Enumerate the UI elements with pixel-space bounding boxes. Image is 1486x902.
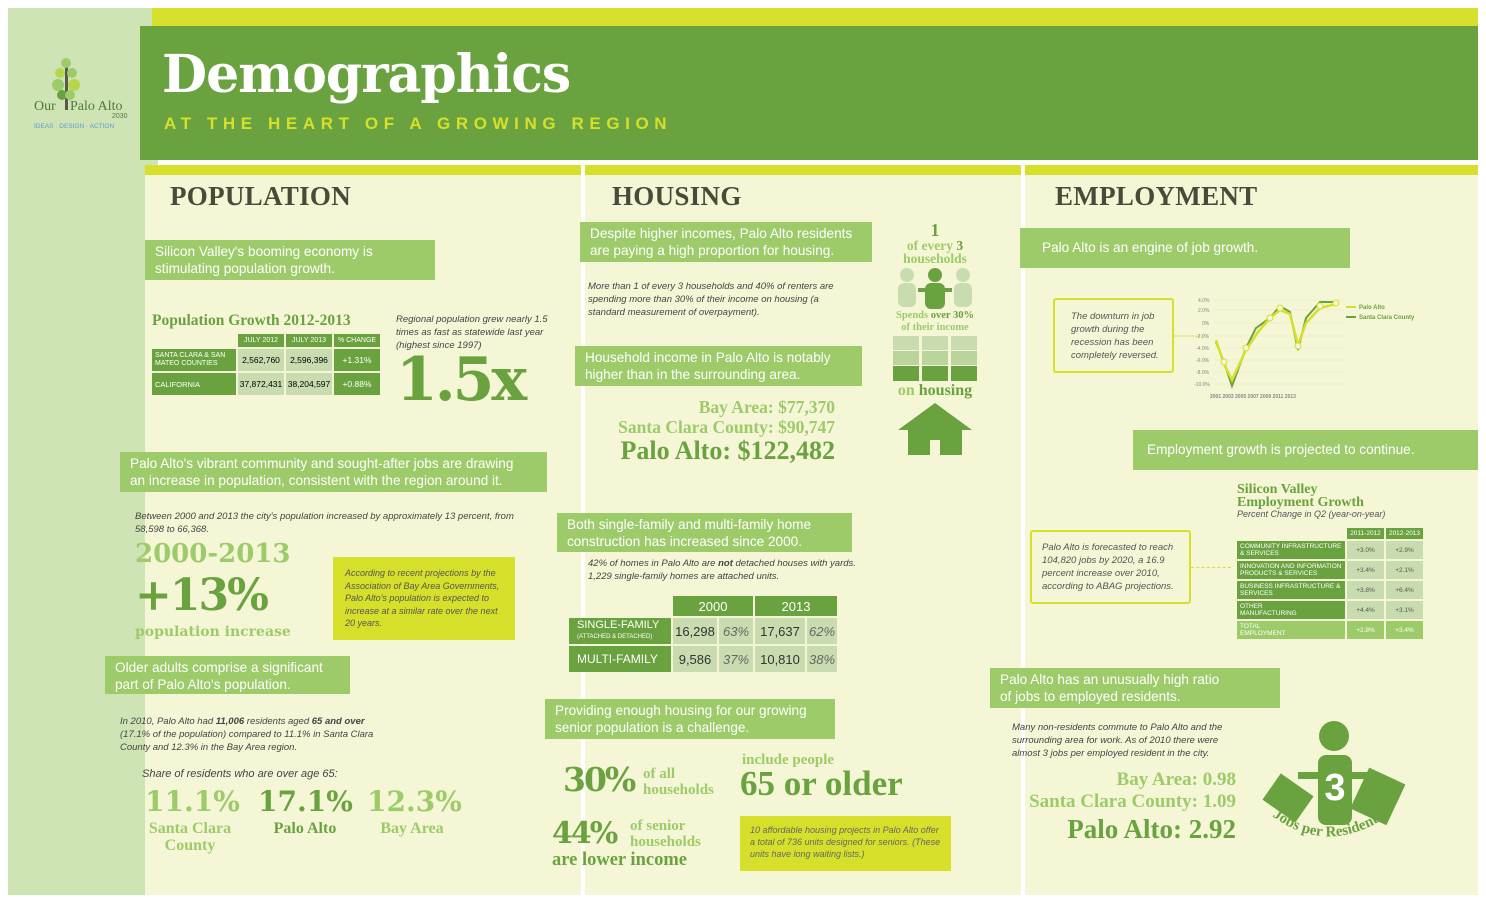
text: 2000-2013: Between 2000 and 2013 the city's population increased by approximately 13 percent, from 58,598 to 66,368.: [135, 511, 514, 535]
employment table: +2.1%: [1395, 566, 1414, 574]
icon: jobs per resident: 3: [1324, 767, 1346, 809]
stat: shares: Santa Clara County: [149, 820, 231, 854]
employment table: +2.9%: [1395, 546, 1414, 554]
header: [140, 26, 1478, 160]
band: vibrant community: an increase in population, consistent with the region around it.: [130, 473, 503, 488]
stat: 30%: include people: [742, 752, 834, 768]
line chart: 4.0%: [1198, 298, 1210, 304]
employment table: +4.4%: [1356, 606, 1375, 614]
band: booming economy: Silicon Valley's booming economy is: [155, 244, 373, 259]
heading: employment: EMPLOYMENT: [1055, 181, 1258, 211]
employment table: +3.8%: [1356, 586, 1375, 594]
housing table: MULTI-FAMILY: [577, 652, 658, 666]
table title: Population Growth 2012-2013: [152, 312, 351, 329]
text: commute: Many non-residents commute to Palo Alto and the surrounding area for work. As of 2010 there were almost 3 jobs per employed resident in the city.: [1012, 722, 1222, 759]
employment table: +3.4%: [1356, 566, 1375, 574]
employment table: OTHER: [1240, 603, 1263, 610]
regional text: Regional population grew nearly 1.5 times as fast as statewide last year (highest since 1997): [396, 314, 548, 351]
title: Demographics: [162, 44, 570, 105]
housing table: 63%: [723, 624, 749, 638]
income figures: Palo Alto: $122,482: [620, 436, 835, 465]
employment table: TOTAL: [1240, 623, 1260, 630]
stat: +13%: [135, 539, 291, 640]
employment table: 2012-2013: [1389, 530, 1420, 537]
stat: +13%: 2000-2013: [135, 539, 291, 569]
band: booming economy: stimulating population growth.: [155, 261, 335, 276]
band: construction: [557, 513, 852, 552]
housing table: 10,810: [760, 652, 800, 666]
icon column: 1 of 3 households: 1: [930, 220, 940, 240]
employment table: MANUFACTURING: [1240, 610, 1297, 617]
band: higher incomes: [580, 222, 872, 262]
logo: [34, 58, 128, 130]
stat: 30%: of all: [643, 766, 675, 782]
stat: shares: 11.1%: [145, 785, 240, 818]
stat: 44%: 44%: [552, 816, 616, 851]
stat: +13%: population increase: [135, 624, 291, 640]
line chart: Palo Alto: [1359, 305, 1385, 311]
icon: jobs per resident: [1262, 721, 1406, 836]
band: ratio: Palo Alto has an unusually high ratio: [1000, 672, 1219, 687]
stat: shares: Palo Alto: [274, 820, 336, 837]
line chart: -4.0%: [1196, 346, 1210, 352]
table title: SV employment: Percent Change in Q2 (year-on-year): [1237, 509, 1385, 519]
stat: 30%: 30%: [563, 760, 634, 799]
icon column: 1 of 3 households: on housing: [898, 382, 972, 399]
stat: shares: 17.1%: [258, 785, 353, 818]
logo: 2030: [112, 113, 128, 120]
housing table: 37%: [723, 652, 749, 666]
band: older adults: [105, 656, 350, 694]
text: 2010 seniors: In 2010, Palo Alto had 11,006 residents aged 65 and over (17.1% of the population) compared to 11.1% in Santa Clara County and 12.3% in the Bay Area region.: [120, 716, 373, 753]
callout: forecast: Palo Alto is forecasted to reach 104,820 jobs by 2020, a 16.9 percent increase over 2010, according to ABAG projections.: [1042, 542, 1174, 592]
line chart: 2001 2003 2005 2007 2009 2011 2013: [1210, 394, 1296, 400]
income figures: Santa Clara County: $90,747: [618, 417, 835, 437]
line chart: -2.0%: [1196, 334, 1210, 340]
band: construction: construction has increased since 2000.: [567, 534, 802, 549]
band: senior housing: senior population is a challenge.: [555, 720, 749, 735]
employment table: COMMUNITY INFRASTRUCTURE & SERVICES: [1240, 543, 1341, 557]
housing table: 2013: [782, 598, 810, 614]
table title: SV employment: Silicon Valley: [1237, 482, 1318, 497]
line chart: Santa Clara County: [1359, 315, 1415, 321]
band: higher incomes: Despite higher incomes, Palo Alto residents: [590, 226, 852, 241]
ratios: [1029, 769, 1236, 844]
callout: projections: According to recent projections by the Association of Bay Area Governments, Palo Alto's population is expected to increase at a similar rate over the next 20 years.: [345, 568, 499, 628]
stat: 30%: [563, 752, 903, 803]
panel: housing: [585, 165, 1021, 895]
icon column: 1 of 3 households: households: [903, 251, 967, 266]
line chart: -6.0%: [1196, 358, 1210, 364]
population table: +0.88%: [342, 379, 372, 389]
table title: SV employment: Employment Growth: [1237, 495, 1364, 510]
line chart: -10.0%: [1194, 382, 1210, 388]
population table: JULY 2013: [292, 337, 326, 344]
housing table: [569, 596, 837, 672]
employment table: +3.0%: [1356, 546, 1375, 554]
employment table: EMPLOYMENT: [1240, 630, 1286, 637]
panel: employment: [1025, 165, 1478, 895]
line chart: 0%: [1202, 321, 1210, 327]
housing table: (ATTACHED & DETACHED): [577, 634, 652, 640]
housing table: 16,298: [675, 624, 715, 638]
band: household income: Household income in Palo Alto is notably: [585, 350, 831, 365]
stat: shares: [145, 785, 462, 854]
callout: affordable units: 10 affordable housing projects in Palo Alto offer a total of 736 units designed for seniors. (These units have long waiting lists.): [750, 825, 940, 859]
callout: forecast: [1030, 530, 1191, 604]
stat: shares: Bay Area: [380, 820, 444, 837]
icon column: 1 of 3 households: Spends over 30%: [896, 310, 974, 321]
housing table: 38%: [809, 652, 835, 666]
band: vibrant community: [120, 452, 547, 492]
population table: CALIFORNIA: [155, 380, 200, 388]
band: household income: higher than in the surrounding area.: [585, 367, 800, 382]
housing table: 9,586: [679, 652, 711, 666]
population table: 2,596,396: [290, 355, 328, 365]
stat: 30%: 65 or older: [740, 764, 903, 803]
employment table: INNOVATION AND INFORMATION PRODUCTS & SERVICES: [1240, 563, 1341, 577]
heading: housing: HOUSING: [612, 181, 742, 211]
text: detached: 42% of homes in Palo Alto are not detached houses with yards. 1,229 single-family homes are attached units.: [588, 558, 856, 582]
icon column: 1 of 3 households: of every 3: [907, 238, 963, 253]
callout: projections: [333, 557, 515, 640]
stat: 44%: [552, 816, 701, 870]
band: engine: [1020, 228, 1350, 268]
logo: Our: [34, 99, 56, 114]
band: construction: Both single-family and multi-family home: [567, 517, 811, 532]
ratios: Bay Area: 0.98: [1117, 769, 1236, 790]
band: senior housing: Providing enough housing for our growing: [555, 703, 807, 718]
population table: SANTA CLARA & SAN MATEO COUNTIES: [155, 352, 225, 367]
icon column: 1 of 3 households: [893, 220, 977, 455]
housing table: 62%: [809, 624, 835, 638]
population table: [152, 334, 380, 395]
band: engine: Palo Alto is an engine of job growth.: [1042, 240, 1258, 255]
callout: downturn: The downturn in job growth during the recession has been completely reversed.: [1071, 311, 1159, 361]
population table: 2,562,760: [242, 355, 280, 365]
band: ratio: [990, 668, 1280, 708]
logo: IDEAS · DESIGN · ACTION: [34, 123, 114, 130]
top yellow bar: [152, 8, 1478, 26]
band: higher incomes: are paying a high proportion for housing.: [590, 243, 834, 258]
employment table: +3.1%: [1395, 606, 1414, 614]
population table: JULY 2012: [244, 337, 278, 344]
subtitle: AT THE HEART OF A GROWING REGION: [164, 114, 672, 133]
icon column: 1 of 3 households: of their income: [901, 322, 969, 333]
panel: population: [145, 165, 581, 895]
band: ratio: of jobs to employed residents.: [1000, 689, 1181, 704]
band: household income: [575, 346, 862, 386]
text: 1 of 3: More than 1 of every 3 households and 40% of renters are spending more than 30% of their income on housing (a standard measurement of overpayment).: [588, 281, 834, 318]
heading: population: POPULATION: [170, 181, 351, 211]
stat: 44%: of senior: [630, 818, 685, 834]
stat: shares: 12.3%: [367, 785, 462, 818]
ratios: Palo Alto: 2.92: [1067, 814, 1236, 844]
income figures: Bay Area: $77,370: [699, 397, 835, 417]
line chart: 2.0%: [1198, 308, 1210, 314]
income figures: [618, 397, 835, 465]
stat: 30%: households: [643, 782, 714, 798]
band: senior housing: [545, 699, 835, 739]
population table: % CHANGE: [338, 337, 376, 344]
stat: 44%: are lower income: [552, 850, 687, 870]
housing table: 2000: [699, 598, 727, 614]
band: vibrant community: Palo Alto's vibrant community and sought-after jobs are drawing: [130, 456, 513, 471]
table title: SV employment: [1237, 482, 1385, 519]
stat: +13%: +13%: [135, 570, 267, 621]
band: projected: [1133, 430, 1478, 470]
employment table: BUSINESS INFRASTRUCTURE & SERVICES: [1240, 583, 1340, 597]
employment table: +6.4%: [1395, 586, 1414, 594]
callout: affordable units: [740, 816, 951, 871]
line chart: [1174, 298, 1415, 400]
population table: 37,872,431: [240, 379, 282, 389]
ratios: Santa Clara County: 1.09: [1029, 791, 1236, 812]
icon: jobs per resident: Jobs per Resident: [1272, 812, 1378, 836]
logo: Palo Alto: [70, 99, 123, 114]
line chart: -8.0%: [1196, 370, 1210, 376]
housing table: 17,637: [760, 624, 800, 638]
population table: 38,204,597: [288, 379, 330, 389]
callout: downturn: [1053, 298, 1174, 373]
band: older adults: part of Palo Alto's population.: [115, 677, 291, 692]
employment table: +3.4%: [1395, 626, 1414, 634]
stat: 44%: households: [630, 834, 701, 850]
employment table: +2.8%: [1356, 626, 1375, 634]
left strip: [8, 8, 158, 895]
band: booming economy: [145, 240, 435, 280]
stat: 1.5x: 1.5x: [396, 345, 524, 415]
band: projected: Employment growth is projected to continue.: [1147, 442, 1414, 457]
band: older adults: Older adults comprise a significant: [115, 660, 323, 675]
employment table: [1237, 528, 1423, 639]
employment table: 2011-2012: [1350, 530, 1381, 537]
population table: +1.31%: [342, 355, 372, 365]
text: share: Share of residents who are over age 65:: [142, 768, 338, 780]
housing table: SINGLE-FAMILY: [577, 619, 659, 631]
